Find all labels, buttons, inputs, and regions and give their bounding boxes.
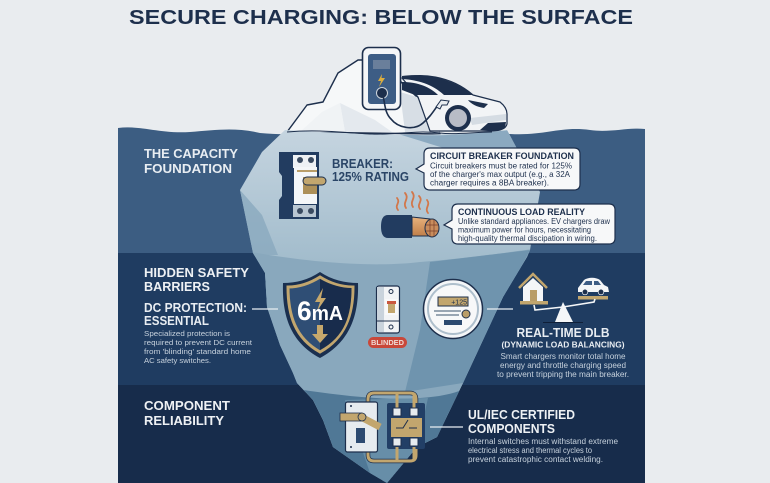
text block: UL/IEC certified components: Internal switches must withstand extreme: [468, 437, 619, 446]
icon: charging cable and plug: [383, 95, 449, 128]
callout: circuit breaker foundation: CIRCUIT BREAKER FOUNDATION: [430, 151, 574, 162]
section heading: component reliability: RELIABILITY: [144, 414, 225, 428]
connector: meter to load balance: [487, 308, 513, 310]
badge: blinded: BLINDED: [371, 340, 404, 347]
text block: DC protection: Specialized protection is: [144, 329, 230, 338]
icon: energy meter: +125: [451, 300, 467, 306]
text block: real-time DLB: [497, 326, 629, 379]
callout: circuit breaker foundation: Circuit breakers must be rated for 125%: [430, 162, 572, 170]
text block: UL/IEC certified components: UL/IEC CERTIFIED: [468, 408, 575, 422]
text block: UL/IEC certified components: COMPONENTS: [468, 422, 555, 436]
text block: DC protection: DC PROTECTION:: [144, 301, 247, 315]
section heading: the capacity foundation: FOUNDATION: [144, 162, 232, 176]
text block: UL/IEC certified components: prevent catastrophic contact welding.: [468, 455, 603, 464]
callout: circuit breaker foundation: [416, 148, 580, 190]
panel: water bands: [118, 127, 645, 483]
connector: DC protection to shield: [252, 308, 278, 310]
text block: DC protection: ESSENTIAL: [144, 314, 209, 328]
section heading: the capacity foundation: THE CAPACITY: [144, 147, 239, 161]
icon: EV car: [402, 75, 507, 131]
text: breaker rating: BREAKER:: [332, 157, 393, 171]
iceberg above water: [287, 60, 440, 134]
icon: energy meter: [424, 280, 482, 338]
icon: heat flames: [397, 192, 428, 213]
icon: load balancing scale: [519, 274, 609, 322]
section heading: component reliability: COMPONENT: [144, 399, 230, 413]
title: SECURE CHARGING: BELOW THE SURFACE: [129, 7, 633, 29]
icon: 6mA shield: 6mA: [297, 296, 343, 326]
text block: real-time DLB: energy and throttle charging speed: [500, 361, 626, 370]
iceberg below water: [230, 125, 550, 483]
callout: circuit breaker foundation: charger requires a 8BA breaker).: [430, 178, 549, 188]
section heading: hidden safety barriers: HIDDEN SAFETY: [144, 266, 250, 280]
text block: DC protection: from 'blinding' standard home: [144, 347, 251, 356]
callout: circuit breaker foundation: of the charger's max output (e.g., a 32A: [430, 170, 571, 179]
text block: DC protection: AC safety switches.: [144, 356, 211, 365]
section heading: component reliability: [144, 399, 230, 428]
callout: continuous load reality: high-quality thermal discipation in wiring.: [458, 234, 597, 243]
badge: blinded: [368, 337, 407, 348]
text block: DC protection: [144, 301, 253, 365]
icon: wall charger: [362, 48, 400, 110]
icon: copper cable: [381, 215, 439, 238]
text block: real-time DLB: Smart chargers monitor total home: [500, 352, 626, 361]
text block: real-time DLB: to prevent tripping the main breaker.: [497, 370, 629, 379]
text block: real-time DLB: REAL-TIME DLB: [516, 326, 610, 340]
text block: UL/IEC certified components: electrical stress and thermal cycles to: [468, 446, 593, 455]
infographic canvas: [118, 10, 645, 483]
text block: UL/IEC certified components: [468, 408, 619, 464]
callout: continuous load reality: Unlike standard appliances. EV chargers draw: [458, 217, 610, 226]
section heading: hidden safety barriers: BARRIERS: [144, 280, 210, 294]
text block: real-time DLB: (DYNAMIC LOAD BALANCING): [502, 340, 625, 350]
section heading: the capacity foundation: [144, 147, 239, 176]
water surface line over iceberg: [287, 131, 492, 134]
callout: continuous load reality: CONTINUOUS LOAD REALITY: [458, 207, 586, 218]
connector: component to certification: [430, 426, 463, 428]
callout: continuous load reality: maximum power for hours, necessitating: [458, 226, 591, 234]
icon: certified switch components: [340, 393, 425, 461]
section heading: hidden safety barriers: [144, 266, 250, 294]
text block: DC protection: required to prevent DC current: [144, 338, 253, 347]
callout: continuous load reality: [444, 204, 615, 244]
text: breaker rating: [332, 157, 409, 184]
text: breaker rating: 125% RATING: [332, 170, 409, 184]
icon: 6mA shield: [283, 272, 358, 358]
icon: blinded breaker: [376, 286, 400, 333]
icon: circuit breaker: [279, 152, 326, 219]
